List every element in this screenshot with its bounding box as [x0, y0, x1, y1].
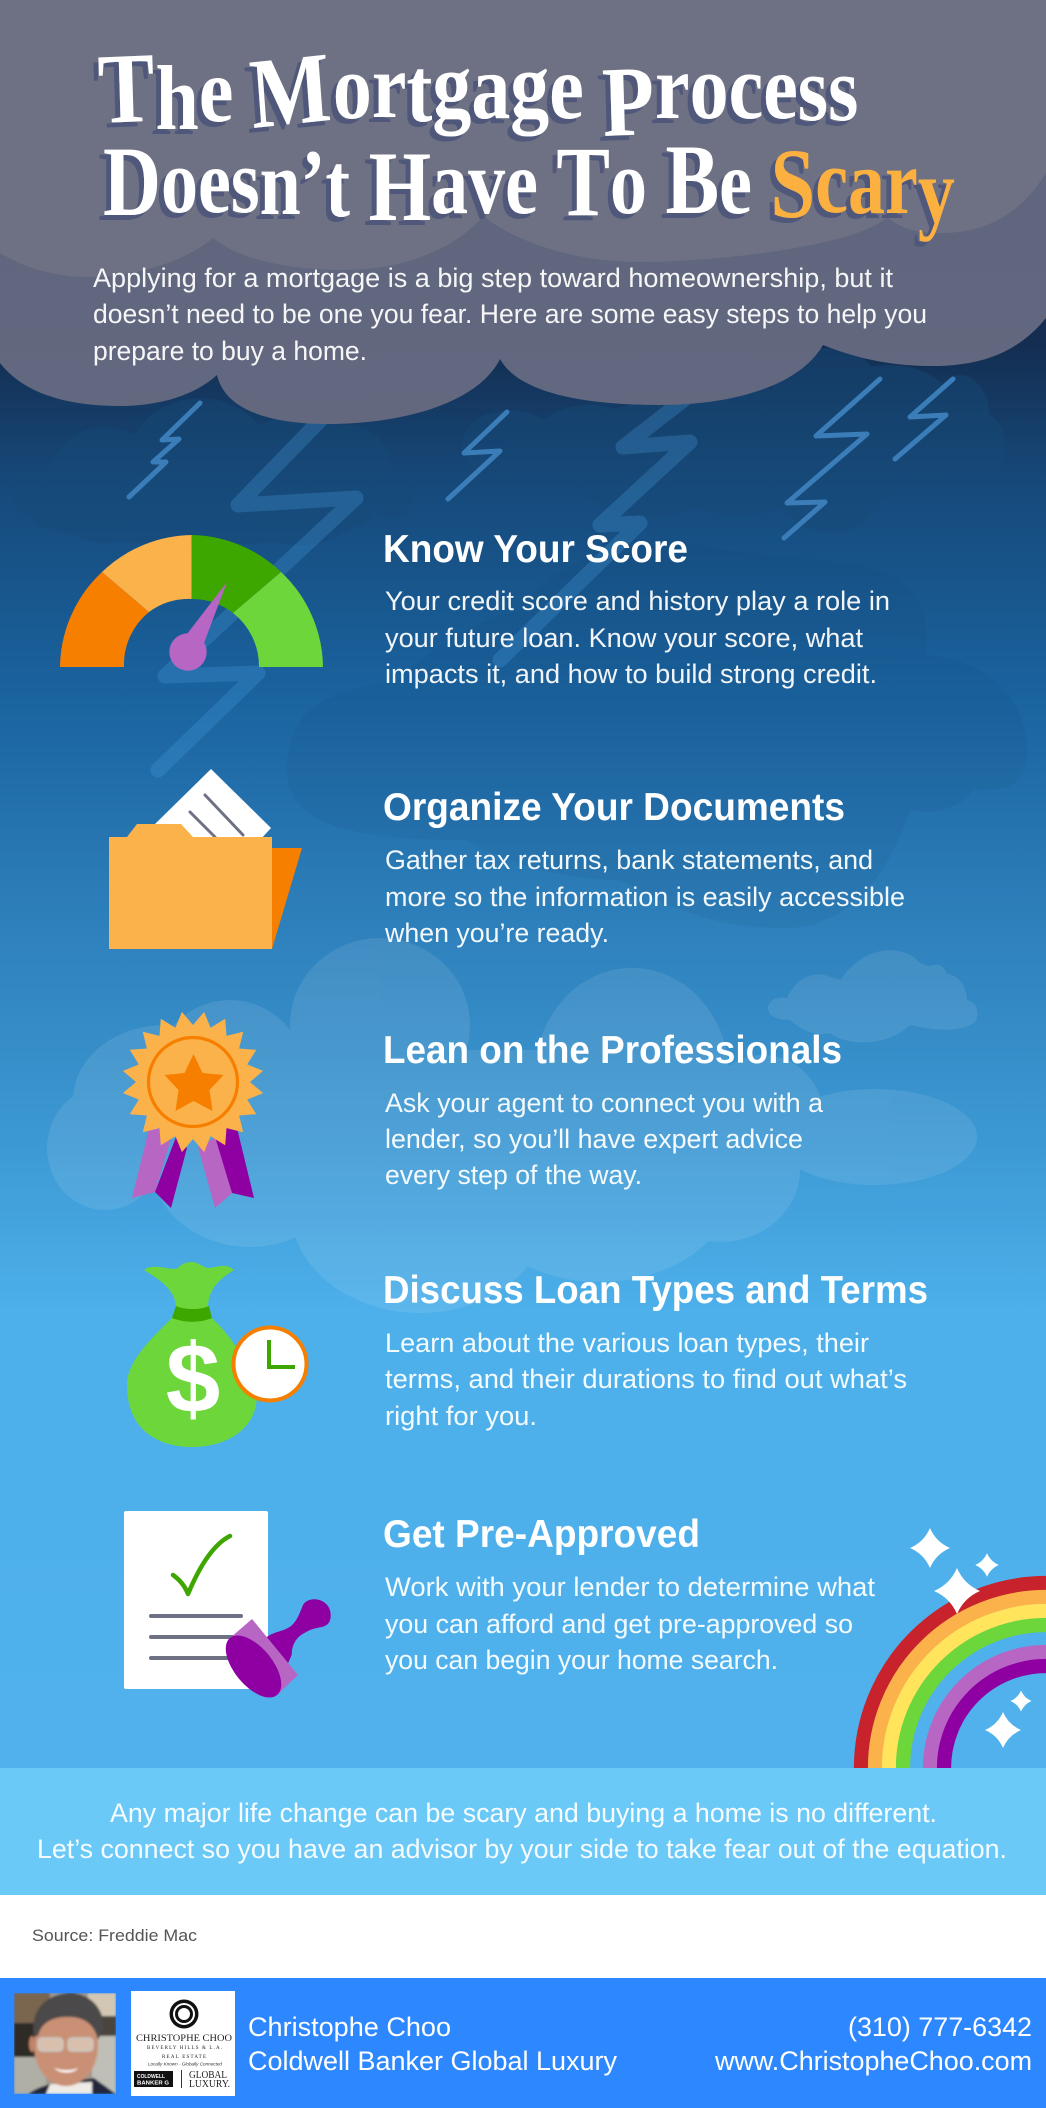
large faded lightning bolt right	[500, 395, 690, 660]
sparkles	[910, 1528, 1032, 1748]
title: M	[246, 32, 334, 151]
step 4 text: Learn about the various loan types, their	[385, 1328, 869, 1358]
title	[96, 32, 955, 243]
title: D	[103, 126, 161, 237]
rainbow	[861, 1583, 1046, 1768]
agency logo: LUXURY.	[189, 2079, 230, 2090]
background cloud: small light	[768, 950, 978, 1042]
agency logo: Locally Known - Globally Connected	[148, 2062, 223, 2066]
agency logo: COLDWELL	[137, 2074, 166, 2080]
intro text: doesn’t need to be one you fear. Here are some easy steps to help you	[93, 299, 927, 329]
icon: money bag with clock: $	[166, 1323, 220, 1433]
storm cloud	[0, 0, 1046, 424]
background cloud: top left	[10, 398, 414, 545]
title: o	[610, 133, 666, 234]
step 2 text: Organize Your Documents	[383, 786, 845, 829]
contact details: (310) 777-6342	[848, 2012, 1032, 2042]
agency logo: GLOBAL	[189, 2070, 227, 2081]
large faded lightning bolt left	[158, 405, 356, 770]
agency logo: REAL ESTATE	[162, 2055, 206, 2060]
icon: credit score gauge	[60, 535, 323, 671]
title: T	[96, 32, 156, 146]
step 3 text: Ask your agent to connect you with a	[385, 1088, 823, 1118]
step 3 text: every step of the way.	[385, 1160, 642, 1190]
title: ave	[431, 133, 556, 234]
step 5 text: you can afford and get pre-approved so	[385, 1609, 853, 1639]
step 1 text: Know Your Score	[383, 528, 688, 571]
step 1 text: Your credit score and history play a role in	[385, 586, 890, 616]
closing message band	[0, 1768, 1046, 1895]
title: ortgage	[333, 35, 603, 142]
agent name	[248, 2012, 617, 2076]
title: rocess	[655, 37, 858, 141]
title: T	[556, 126, 610, 237]
step 2 text: more so the information is easily accessible	[385, 882, 905, 912]
title: cary	[815, 132, 955, 243]
step 1 text	[383, 528, 890, 689]
agency logo	[131, 1991, 235, 2096]
contact details	[714, 2012, 1032, 2076]
agent photo	[14, 1993, 116, 2094]
agency logo: BEVERLY HILLS & L.A.	[147, 2046, 222, 2051]
icon: award ribbon	[123, 1012, 263, 1208]
background cloud: large light	[47, 938, 977, 1313]
source: Source: Freddie Mac	[32, 1927, 197, 1945]
step 2 text	[383, 786, 905, 948]
step 3 text: lender, so you’ll have expert advice	[385, 1124, 803, 1154]
intro text: Applying for a mortgage is a big step toward homeownership, but it	[93, 263, 894, 293]
icon: money bag with clock	[127, 1262, 306, 1447]
closing message band: Let’s connect so you have an advisor by your side to take fear out of the equation.	[37, 1834, 1007, 1864]
footer bar	[0, 1978, 1046, 2108]
background cloud: top right	[462, 348, 1005, 532]
step 3 text	[383, 1029, 842, 1190]
step 4 text: Discuss Loan Types and Terms	[383, 1269, 928, 1312]
step 5 text: Work with your lender to determine what	[385, 1572, 876, 1602]
title: S	[770, 128, 815, 239]
step 4 text: right for you.	[385, 1401, 537, 1431]
step 1 text: impacts it, and how to build strong credit.	[385, 659, 877, 689]
step 5 text: Get Pre-Approved	[383, 1513, 700, 1556]
step 2 text: when you’re ready.	[384, 918, 609, 948]
step 5 text	[383, 1513, 876, 1675]
icon: approved document with stamp	[124, 1511, 331, 1707]
step 4 text: terms, and their durations to find out what’s	[385, 1364, 907, 1394]
agent name: Coldwell Banker Global Luxury	[248, 2046, 617, 2076]
agency logo: BANKER G	[137, 2080, 169, 2086]
title: B	[666, 124, 719, 235]
title: he	[155, 40, 253, 150]
contact details: www.ChristopheChoo.com	[714, 2046, 1032, 2076]
agency logo: CHRISTOPHE CHOO	[136, 2034, 232, 2044]
step 4 text	[383, 1269, 928, 1431]
closing message band: Any major life change can be scary and buying a home is no different.	[110, 1798, 937, 1828]
step 3 text: Lean on the Professionals	[383, 1029, 842, 1072]
intro text: prepare to buy a home.	[93, 336, 367, 366]
intro text	[93, 263, 927, 366]
title: P	[601, 45, 656, 159]
title: oesn’t	[161, 132, 369, 237]
title: H	[369, 131, 431, 242]
agent name: Christophe Choo	[248, 2012, 451, 2042]
icon: document folder	[109, 769, 302, 949]
small lightning bolts	[129, 379, 953, 538]
background cloud: middle dark	[287, 544, 1027, 928]
step 2 text: Gather tax returns, bank statements, and	[385, 845, 873, 875]
step 5 text: you can begin your home search.	[385, 1645, 778, 1675]
title: e	[719, 133, 770, 234]
step 1 text: your future loan. Know your score, what	[385, 623, 864, 653]
source	[0, 1895, 1046, 1978]
